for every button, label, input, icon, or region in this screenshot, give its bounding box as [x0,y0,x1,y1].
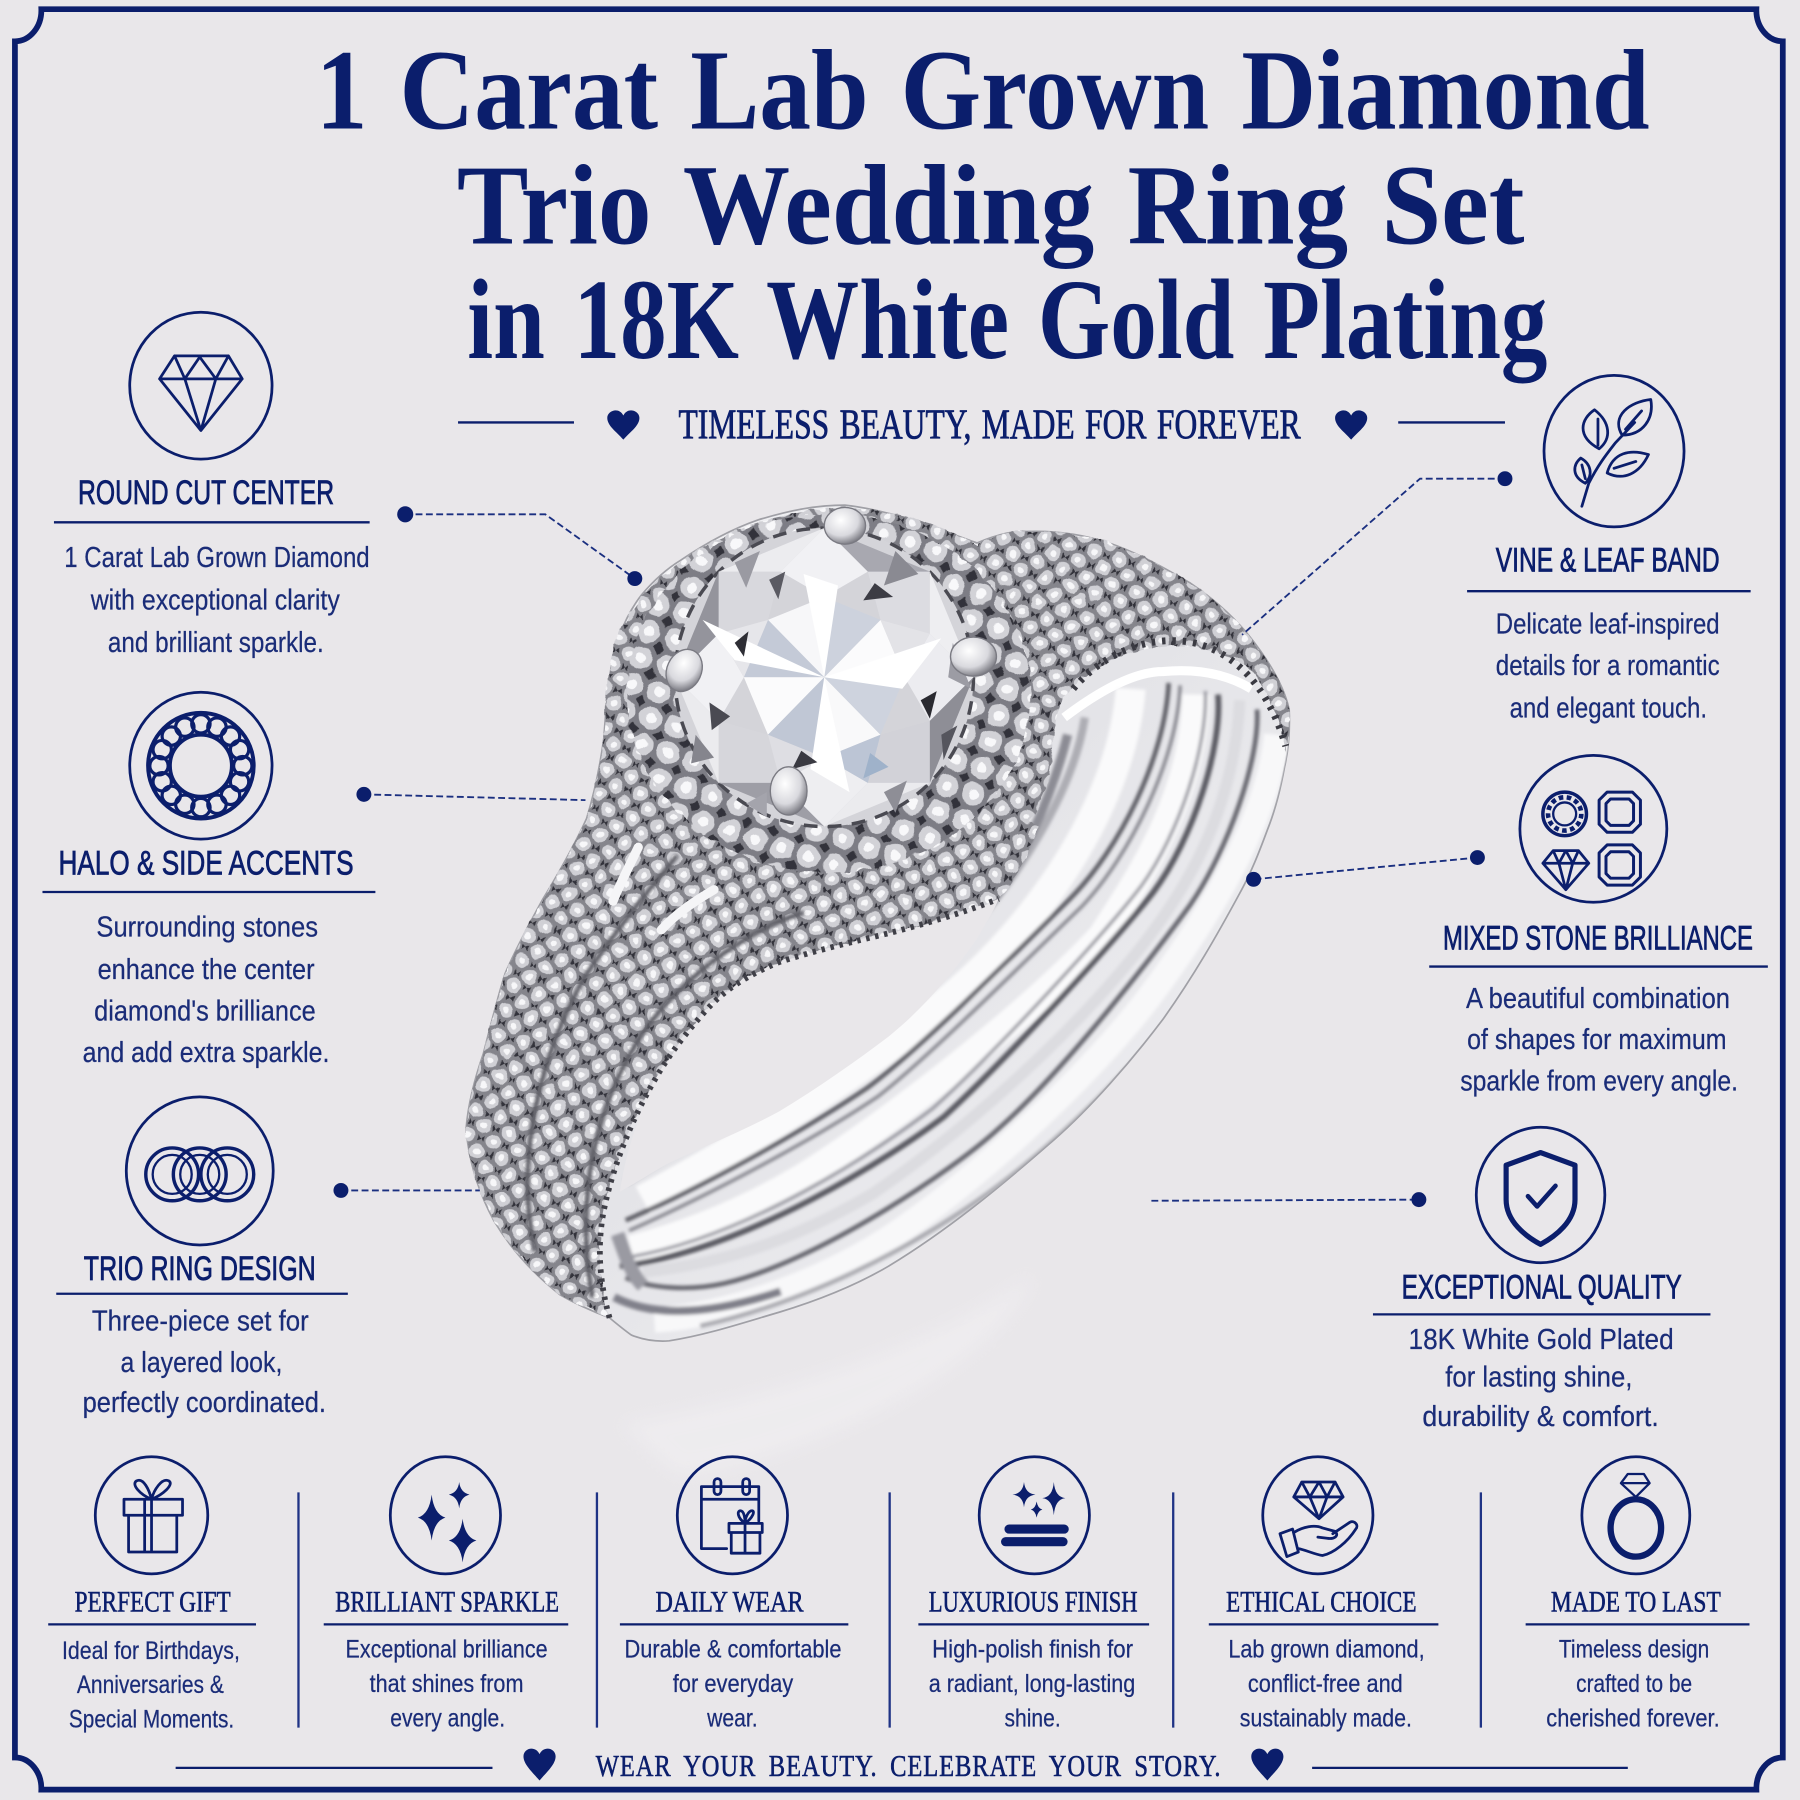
panel: halo and side accents [42,692,375,1069]
bottom column dividers [298,1492,1481,1728]
prong settings [659,507,996,815]
halo inner stones [627,514,1031,872]
description [1460,983,1738,1098]
description: cherished forever. [1546,1705,1720,1733]
subtitle with hearts: TIMELESS BEAUTY, MADE FOR FOREVER [678,402,1301,449]
description: a layered look, [121,1347,282,1379]
description: a radiant, long-lasting [929,1670,1135,1698]
description: Anniversaries & [77,1671,224,1699]
title: 1 Carat Lab Grown Diamond [316,27,1650,154]
description [1409,1324,1674,1433]
footer tagline with hearts [176,1748,1628,1783]
description: Ideal for Birthdays, [62,1637,240,1665]
description: Durable & comfortable [624,1636,841,1664]
description: Three-piece set for [92,1305,309,1337]
icon: shield check [1476,1127,1605,1263]
icon: diamond above hand [1263,1457,1373,1574]
ring opening [620,899,999,1192]
heading: MADE TO LAST [1551,1586,1721,1619]
description: Lab grown diamond, [1228,1636,1425,1664]
description: that shines from [370,1670,523,1698]
title [316,27,1650,383]
panel: daily wear [620,1457,848,1733]
description: Surrounding stones [96,912,318,944]
heading: LUXURIOUS FINISH [929,1586,1138,1619]
icon: calendar with gift [677,1457,788,1574]
icon: sparkles [390,1457,501,1574]
description: durability & comfort. [1422,1401,1659,1433]
icon: polished stack with sparkles [979,1457,1089,1574]
panel: mixed stone brilliance [1429,755,1768,1098]
description: and elegant touch. [1510,692,1707,724]
description: Special Moments. [69,1706,234,1734]
icon: gift box [95,1457,208,1574]
description: every angle. [390,1705,505,1733]
description: of shapes for maximum [1467,1024,1727,1056]
pave shank prong edge [600,899,999,1318]
heading: DAILY WEAR [655,1586,804,1619]
icon: diamond ring [1582,1457,1690,1574]
halo outer stones [605,507,1055,904]
icon: mixed stone shapes [1520,755,1667,902]
description: sustainably made. [1240,1705,1412,1733]
description [1228,1636,1425,1733]
panel: trio ring design [56,1097,348,1419]
description: 1 Carat Lab Grown Diamond [64,542,370,574]
description: crafted to be [1576,1670,1692,1698]
heading: TRIO RING DESIGN [84,1250,316,1288]
description: details for a romantic [1496,650,1720,682]
panel: made to last [1526,1457,1749,1733]
panel: perfect gift [48,1457,256,1734]
panel: exceptional quality [1373,1127,1710,1433]
description: Exceptional brilliance [346,1636,548,1664]
heading: ETHICAL CHOICE [1226,1586,1417,1619]
description: and brilliant sparkle. [108,627,324,659]
icon: halo [130,692,272,839]
left pave shank [466,652,1039,1318]
description: shine. [1004,1705,1061,1733]
description: conflict-free and [1248,1670,1403,1698]
panel: round cut center [54,312,370,659]
heading: PERFECT GIFT [75,1586,231,1619]
description: diamond's brilliance [94,996,316,1028]
panel: ethical choice [1209,1457,1438,1733]
title: Trio Wedding Ring Set [457,141,1524,268]
description: High-polish finish for [932,1636,1133,1664]
description: for lasting shine, [1445,1362,1632,1394]
title: in 18K White Gold Plating [467,256,1547,383]
description: Delicate leaf-inspired [1496,609,1720,641]
ring silhouette [466,505,1289,1341]
panel: luxurious finish [918,1457,1149,1733]
description [346,1636,548,1733]
description: and add extra sparkle. [83,1037,329,1069]
description [624,1636,841,1733]
soft reflection beneath ring [620,1274,1033,1475]
center diamond [675,528,973,827]
description: perfectly coordinated. [83,1387,326,1419]
heading: ROUND CUT CENTER [78,474,334,512]
description [83,912,329,1069]
description [929,1636,1135,1733]
description [64,542,370,659]
heading: BRILLIANT SPARKLE [335,1586,559,1619]
heading: HALO & SIDE ACCENTS [59,845,354,883]
description [1496,609,1720,724]
panel: vine and leaf band [1467,375,1751,724]
description: with exceptional clarity [90,585,340,617]
footer tagline with hearts: WEAR YOUR BEAUTY. CELEBRATE YOUR STORY. [596,1748,1221,1783]
leader lines [333,471,1512,1207]
description: A beautiful combination [1466,983,1730,1015]
description [83,1305,326,1419]
band strips and grooves [614,671,1277,1326]
icon: leaf sprig [1544,375,1684,527]
description [1546,1636,1720,1733]
description: sparkle from every angle. [1460,1066,1738,1098]
top right band rim prongs [1073,641,1286,746]
icon: three rings [126,1097,273,1245]
description: Timeless design [1559,1636,1709,1664]
top right pave band [953,531,1289,758]
split between shanks [528,855,677,1251]
description: wear. [706,1705,758,1733]
ring photo illustration [465,504,1290,1342]
heading: EXCEPTIONAL QUALITY [1402,1268,1682,1306]
description: enhance the center [98,954,315,986]
pave stones [466,507,1289,1318]
description: for everyday [673,1670,794,1698]
panel: brilliant sparkle [324,1457,568,1733]
description [62,1637,240,1734]
description: 18K White Gold Plated [1409,1324,1674,1356]
icon: diamond [130,312,272,459]
